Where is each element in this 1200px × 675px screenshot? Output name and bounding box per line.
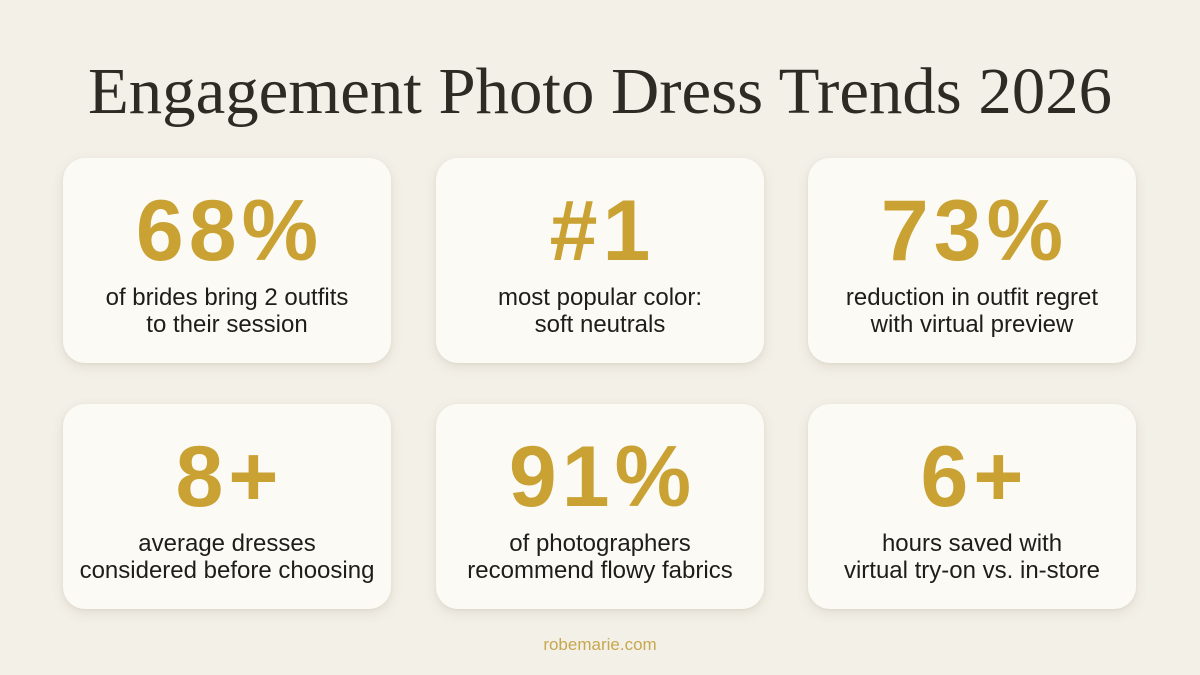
stat number: 73% bbox=[881, 183, 1068, 279]
stat description bbox=[498, 284, 702, 338]
stat description: of brides bring 2 outfits bbox=[106, 284, 348, 311]
stat description: hours saved with bbox=[882, 530, 1062, 557]
stat description bbox=[106, 284, 348, 338]
stat description: average dresses bbox=[138, 530, 316, 557]
card: 68% bbox=[63, 158, 391, 363]
stat description: recommend flowy fabrics bbox=[467, 557, 733, 584]
stat description: to their session bbox=[146, 311, 308, 338]
stat number: 68% bbox=[136, 183, 323, 279]
card: 6+ bbox=[808, 404, 1136, 609]
stat description bbox=[846, 284, 1098, 338]
stat description bbox=[467, 530, 733, 584]
card: 73% bbox=[808, 158, 1136, 363]
stat description: most popular color: bbox=[498, 284, 702, 311]
stat description: soft neutrals bbox=[535, 311, 665, 338]
stat description: virtual try-on vs. in-store bbox=[844, 557, 1100, 584]
stat description bbox=[844, 530, 1100, 584]
card: 91% bbox=[436, 404, 764, 609]
stat description: with virtual preview bbox=[871, 311, 1073, 338]
stat description bbox=[80, 530, 374, 584]
stat description: reduction in outfit regret bbox=[846, 284, 1098, 311]
stat number: 91% bbox=[509, 429, 696, 525]
footer: website: robemarie.com bbox=[543, 635, 657, 654]
card: 8+ bbox=[63, 404, 391, 609]
stat description: considered before choosing bbox=[80, 557, 374, 584]
card: #1 bbox=[436, 158, 764, 363]
title: Engagement Photo Dress Trends 2026 bbox=[88, 55, 1112, 128]
stat number: 6+ bbox=[920, 429, 1029, 525]
stat description: of photographers bbox=[509, 530, 691, 557]
stat number: 8+ bbox=[175, 429, 284, 525]
stat number: #1 bbox=[550, 183, 655, 279]
